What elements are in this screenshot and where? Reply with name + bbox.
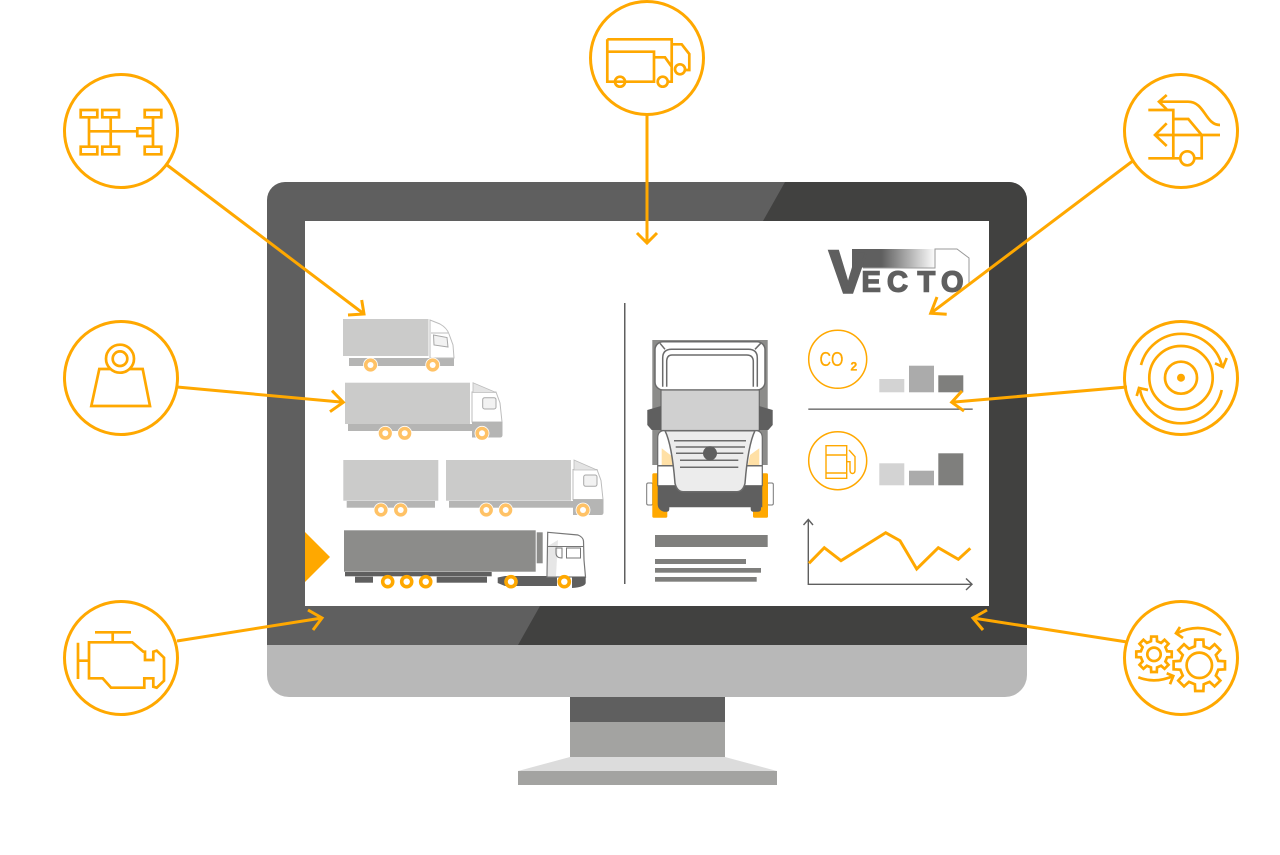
- icon: vehicle weight: [64, 322, 178, 434]
- icon: gearbox: [1124, 602, 1238, 714]
- VECTO logo: V: [829, 238, 867, 306]
- truck front view: [647, 340, 773, 518]
- arrow: bottom right: [973, 610, 1127, 642]
- side tyres: [647, 473, 773, 518]
- truck 2: rigid large: [345, 383, 502, 440]
- truck 3: road train: [343, 460, 604, 517]
- line chart: [804, 519, 972, 590]
- CO2 badge: [809, 330, 867, 388]
- arrow: right: [952, 387, 1127, 411]
- arrow: top right: [931, 160, 1134, 314]
- icon: engine: [64, 602, 178, 714]
- VECTO logo: [829, 238, 969, 306]
- monitor stand neck: [570, 697, 725, 757]
- bezel shadow: [518, 182, 1027, 645]
- vertical divider: [624, 303, 626, 584]
- arrow: top left: [167, 165, 364, 315]
- icon: tyre rolling resistance: [1124, 322, 1238, 434]
- arrow: left: [177, 387, 343, 412]
- fuel bar chart: [879, 453, 963, 485]
- CO2 bar chart: [808, 366, 973, 410]
- screen: [305, 221, 989, 606]
- CO2 badge: 2: [850, 360, 858, 374]
- CO2 badge: CO: [820, 349, 844, 371]
- truck 1: rigid small: [343, 319, 454, 372]
- monitor chin: [267, 645, 1027, 697]
- monitor: [267, 182, 1027, 785]
- placeholder text block: [655, 535, 768, 582]
- icon: aerodynamics: [1124, 74, 1238, 188]
- icon: delivery trucks: [590, 2, 704, 114]
- icon: axle configuration: [64, 74, 178, 188]
- arrow: bottom left: [177, 610, 322, 641]
- arrow: top: [637, 115, 657, 243]
- VECTO logo: ECTO: [862, 266, 964, 298]
- monitor stand base: [518, 757, 777, 785]
- truck 4: highlighted tractor and semi-trailer: [344, 530, 586, 588]
- fuel badge: [809, 432, 867, 490]
- selection marker triangle: [305, 532, 330, 582]
- monitor bezel: [267, 182, 1027, 645]
- radiator grille: [665, 431, 755, 492]
